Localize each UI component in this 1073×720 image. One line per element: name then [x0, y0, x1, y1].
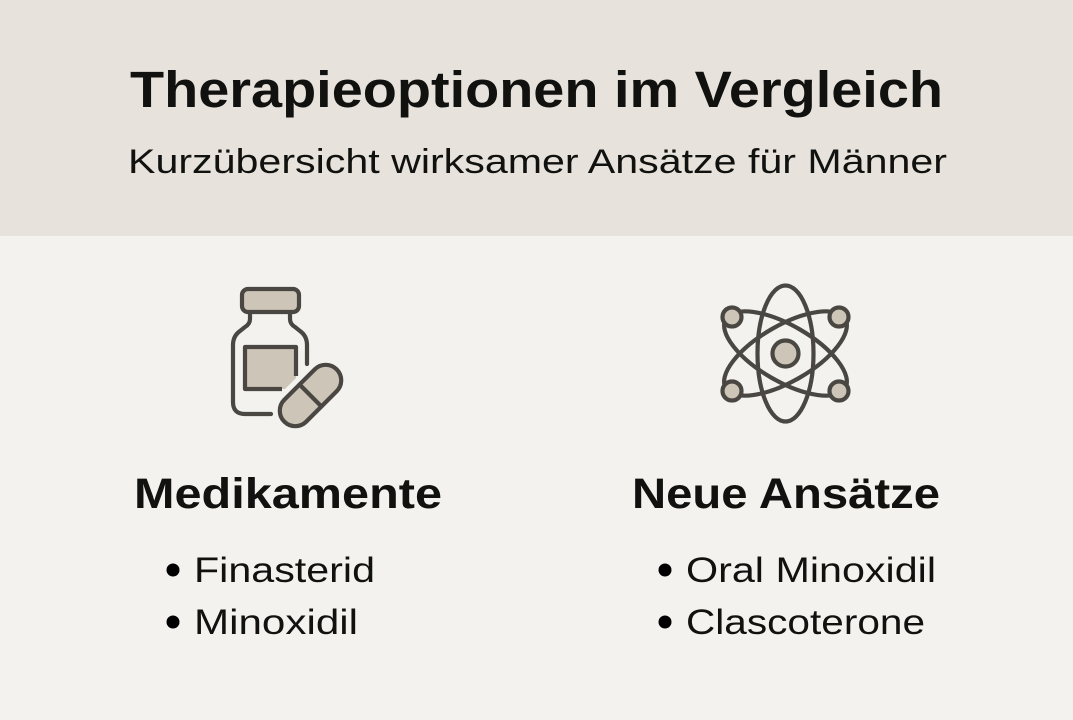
title: Therapieoptionen im Vergleich	[130, 61, 943, 118]
heading: Medikamente: Medikamente	[134, 470, 442, 518]
list: Neue Ansätze items: Oral Minoxidil	[686, 550, 936, 590]
panel: Medikamente	[134, 289, 442, 642]
panel: Neue Ansätze	[632, 286, 940, 642]
list: Neue Ansätze items	[658, 550, 936, 642]
list: Neue Ansätze items: Clascoterone	[686, 602, 925, 642]
list: Medikamente items	[166, 550, 375, 642]
heading: Neue Ansätze: Neue Ansätze	[632, 470, 940, 518]
subtitle: Kurzübersicht wirksamer Ansätze für Männer	[128, 143, 947, 181]
icon: medicine bottle and capsule	[233, 289, 348, 433]
icon: atom	[712, 286, 859, 422]
header band	[0, 0, 1073, 236]
list: Medikamente items: Minoxidil	[194, 602, 358, 642]
list: Medikamente items: Finasterid	[194, 550, 375, 590]
